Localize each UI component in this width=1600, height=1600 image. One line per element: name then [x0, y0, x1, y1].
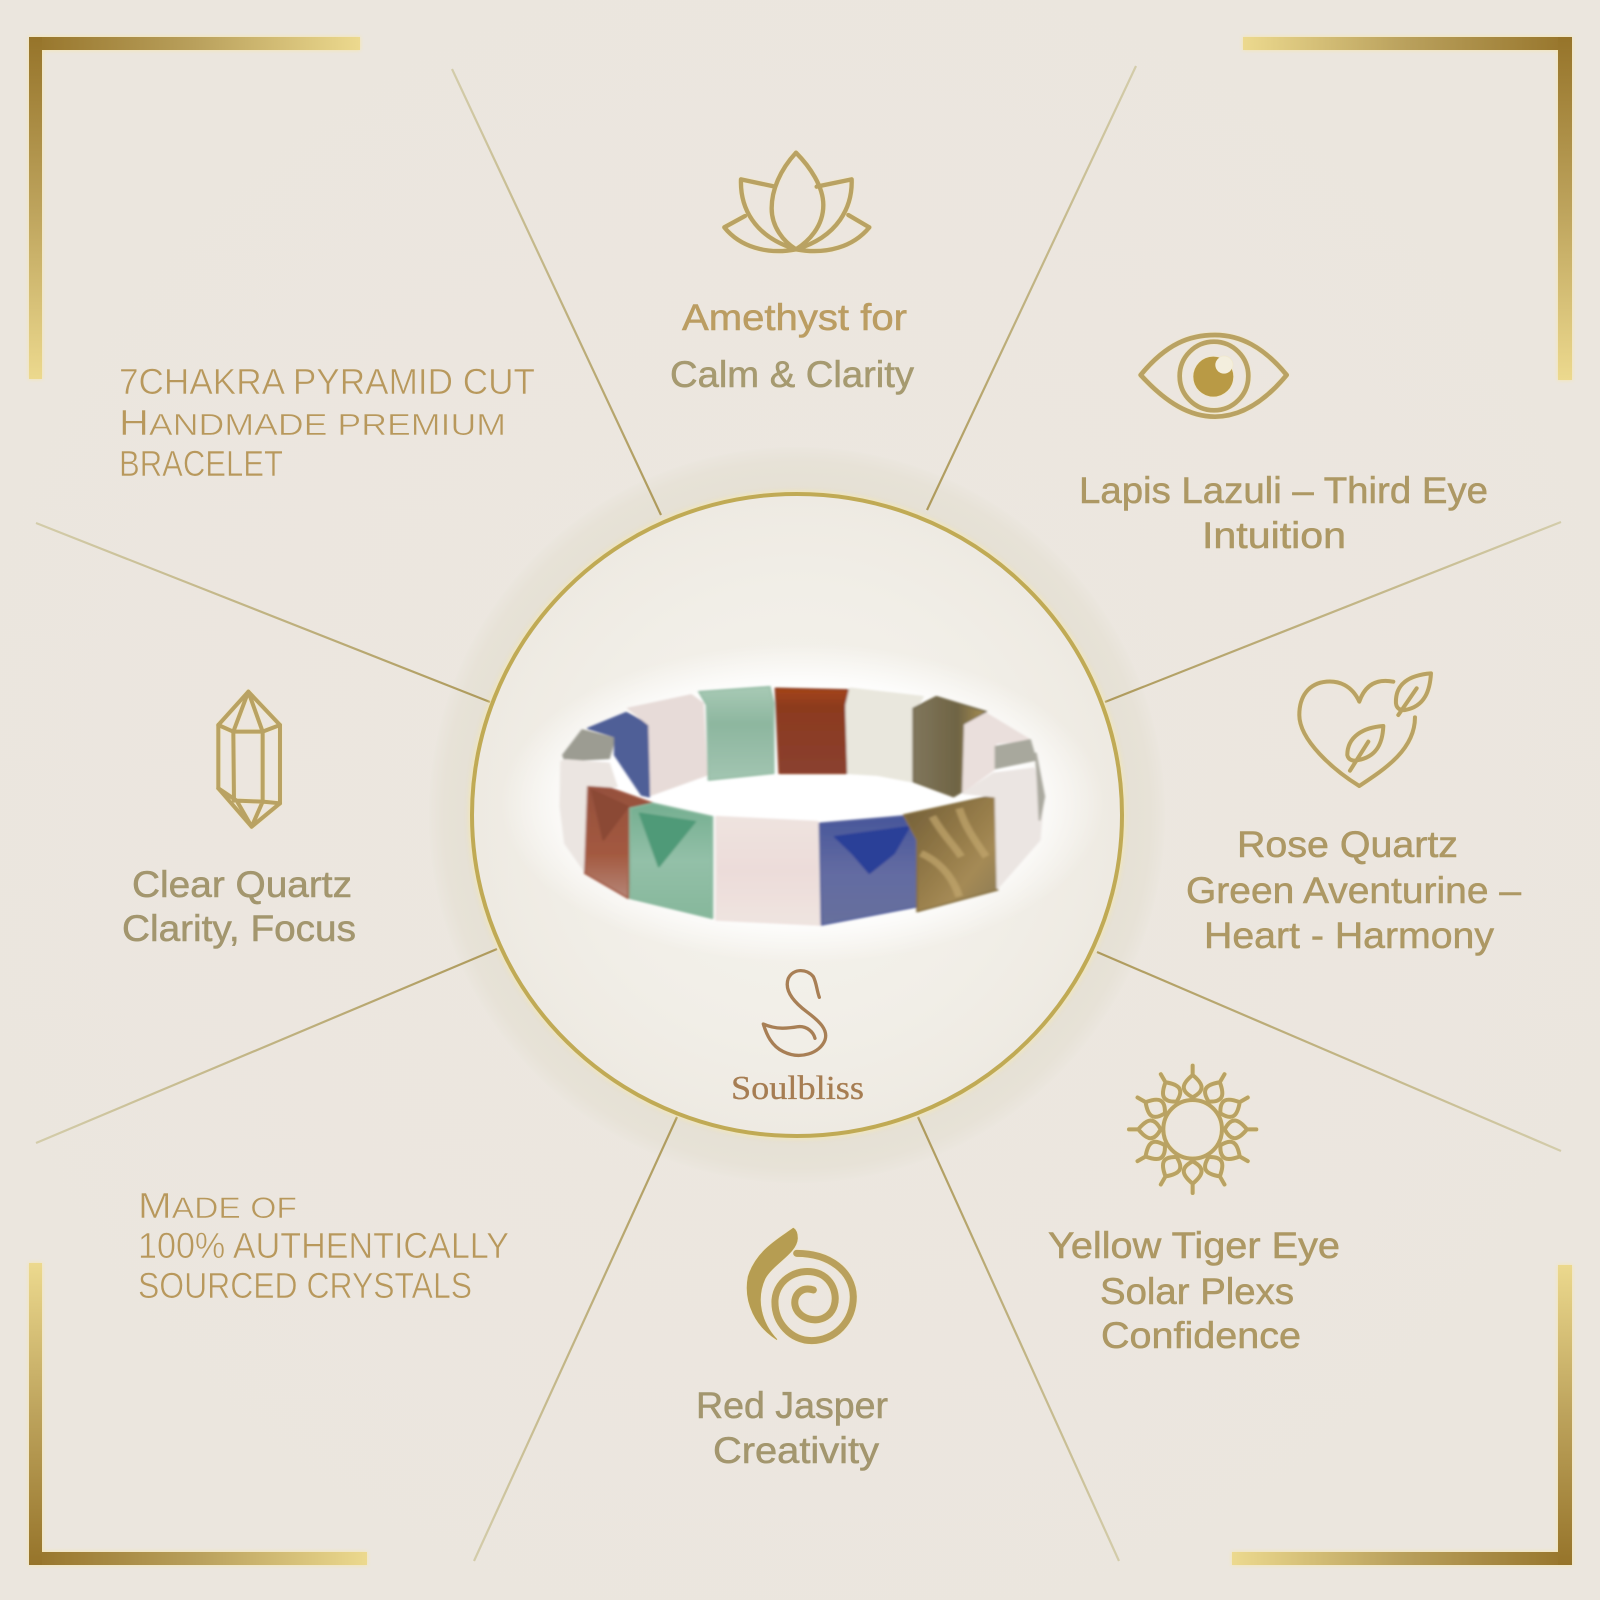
corner frame: bottom right — [1232, 1265, 1572, 1565]
label: Amethyst: Amethyst for — [682, 297, 907, 338]
icon: heart with leaves — [1299, 673, 1431, 786]
label: Clarity, Focus: Clarity, Focus — [122, 908, 356, 949]
icon: spiral — [747, 1228, 853, 1341]
segment: Lapis Lazuli — [1079, 335, 1488, 556]
label: Intuition: Intuition — [1202, 515, 1346, 556]
bracelet photo illustration — [500, 643, 1105, 963]
label: Yellow Tiger Eye: Yellow Tiger Eye — [1048, 1225, 1340, 1266]
front row beads — [560, 753, 1044, 925]
outer halo ring — [429, 447, 1165, 1183]
corner frame: top right — [1243, 37, 1572, 380]
corner frame: top left — [29, 37, 360, 379]
icon: eye — [1141, 335, 1287, 417]
label: Solar Plexs: Solar Plexs — [1100, 1271, 1294, 1312]
text block: authenticity note — [138, 1185, 509, 1306]
text block: authenticity note: 100% AUTHENTICALLY — [138, 1225, 509, 1266]
label: Lapis Lazuli: Lapis Lazuli – Third Eye — [1079, 470, 1488, 511]
text block: authenticity note: SOURCED CRYSTALS — [138, 1265, 472, 1306]
label: Calm and Clarity: Calm & Clarity — [670, 354, 915, 395]
text block: product description: BRACELET — [119, 443, 283, 484]
segment: Yellow Tiger Eye — [1048, 1066, 1340, 1356]
corner frame: bottom left — [29, 1263, 367, 1565]
icon: sun — [1129, 1066, 1256, 1193]
segment: Red Jasper — [696, 1228, 888, 1471]
text block: authenticity note: MADE OF — [138, 1185, 297, 1226]
brand name: Soulbliss — [731, 1070, 864, 1107]
label: Confidence: Confidence — [1101, 1315, 1301, 1356]
inner disc with gold ring — [472, 494, 1122, 1136]
segment: Rose Quartz and Green Aventurine — [1186, 673, 1521, 956]
segment: Clear Quartz — [122, 692, 356, 949]
text block: product description — [119, 361, 535, 484]
label: Clear Quartz: Clear Quartz — [132, 864, 352, 905]
icon: crystal — [218, 692, 280, 827]
text block: product description: HANDMADE PREMIUM — [119, 402, 506, 443]
icon: lotus — [724, 153, 869, 251]
label: Heart Harmony: Heart - Harmony — [1204, 915, 1495, 956]
icon: Soulbliss swan logo — [763, 971, 826, 1055]
text block: product description: 7CHAKRA PYRAMID CUT — [119, 361, 535, 402]
label: Creativity: Creativity — [713, 1430, 880, 1471]
label: Rose Quartz: Rose Quartz — [1237, 824, 1458, 865]
segment: Amethyst — [670, 153, 915, 395]
label: Green Aventurine: Green Aventurine – — [1186, 870, 1521, 911]
back row beads — [563, 687, 1036, 797]
label: Red Jasper: Red Jasper — [696, 1385, 888, 1426]
